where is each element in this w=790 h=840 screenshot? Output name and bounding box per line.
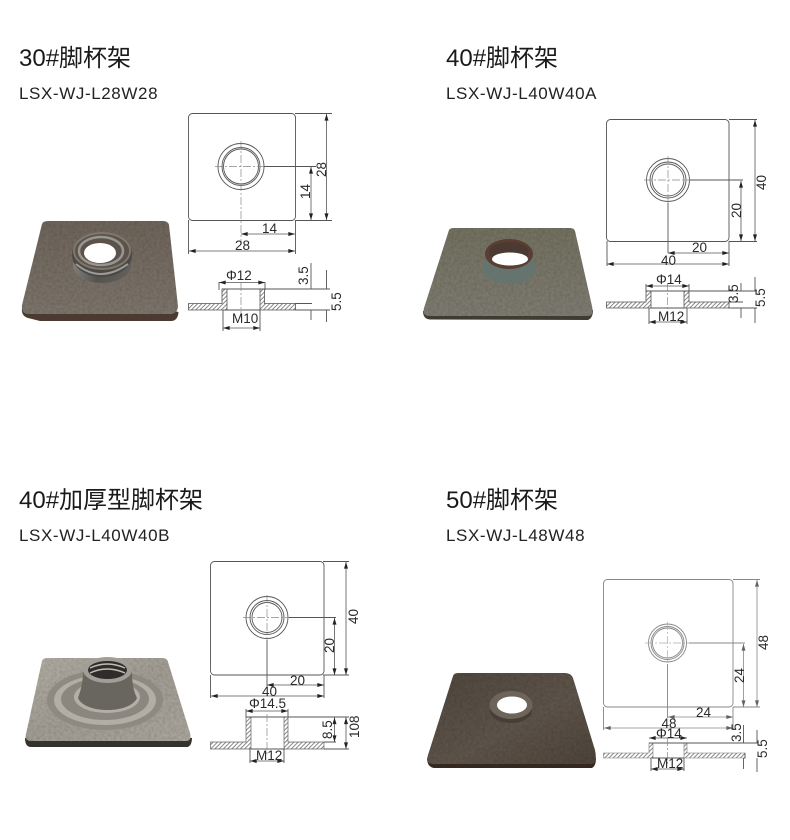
- model code: L40W40B: LSX-WJ-L40W40B: [19, 526, 170, 545]
- dimension labels: top view: 24: [732, 667, 747, 683]
- photo: 30# plate: [22, 221, 178, 321]
- section view drawing: M12: [256, 748, 282, 763]
- top view drawing: 40: [661, 253, 676, 268]
- top view drawing: 40: [262, 684, 277, 699]
- section view drawing: 3.5: [296, 266, 311, 285]
- dimension labels: top view: 48: [661, 716, 677, 731]
- section view drawing: Φ12: [226, 268, 252, 283]
- dimension labels: top view: [661, 635, 771, 731]
- panel: 50# foot cup bracket: [427, 487, 771, 772]
- photo: 40# reinforced plate: [25, 657, 192, 747]
- top view drawing: [210, 562, 361, 699]
- heading: 50#: 50#脚杯架: [446, 487, 558, 514]
- panel: 30# foot cup bracket: [19, 45, 344, 331]
- top view drawing: 28: [235, 238, 250, 253]
- top view drawing: 40: [754, 175, 769, 190]
- heading: 40#: 40#脚杯架: [446, 45, 558, 72]
- section view drawing: M12: [657, 756, 683, 771]
- top view drawing: 20: [729, 203, 744, 218]
- section view drawing: [606, 272, 768, 324]
- dimension labels: top view: 24: [696, 705, 712, 720]
- section view drawing: 5.5: [753, 288, 768, 307]
- photo: 50# plate: [427, 673, 596, 768]
- top view drawing: 14: [262, 221, 278, 236]
- top view drawing: 40: [346, 609, 361, 624]
- top view drawing: 20: [322, 638, 337, 653]
- top view drawing: 20: [692, 240, 707, 255]
- heading: 30#: 30#脚杯架: [19, 45, 131, 72]
- panel: 40# reinforced foot cup bracket: [19, 487, 362, 763]
- top view drawing: [188, 114, 332, 254]
- section view drawing: [188, 263, 344, 331]
- section view drawing: M10: [232, 311, 258, 326]
- dimension labels: top view: 48: [756, 635, 771, 650]
- section view drawing: Φ14.5: [249, 696, 286, 711]
- section view drawing: 108: [347, 715, 362, 738]
- section view drawing: 5.5: [329, 292, 344, 311]
- section view drawing: Φ14: [656, 272, 682, 287]
- top view drawing: 28: [314, 162, 329, 177]
- top view drawing: 14: [298, 183, 313, 199]
- section view drawing: [604, 723, 770, 772]
- heading: 40# reinforced: 40#加厚型脚杯架: [19, 487, 203, 514]
- section view drawing: 5.5: [755, 739, 770, 758]
- section view drawing: [210, 696, 362, 763]
- top view drawing: [606, 120, 769, 268]
- section view drawing: 8.5: [320, 720, 335, 739]
- section view drawing: M12: [658, 309, 684, 324]
- section view drawing: Φ14: [656, 726, 682, 741]
- photo: 40# plate: [423, 228, 593, 320]
- panel: 40# foot cup bracket: [423, 45, 769, 324]
- section view drawing: 3.5: [726, 284, 741, 303]
- model code: L40W40A: LSX-WJ-L40W40A: [446, 84, 597, 103]
- section view drawing: 3.5: [729, 723, 744, 742]
- top view drawing: 20: [290, 673, 305, 688]
- model code: L28W28: LSX-WJ-L28W28: [19, 84, 158, 103]
- model code: L48W48: LSX-WJ-L48W48: [446, 526, 585, 545]
- top view drawing: [604, 580, 760, 730]
